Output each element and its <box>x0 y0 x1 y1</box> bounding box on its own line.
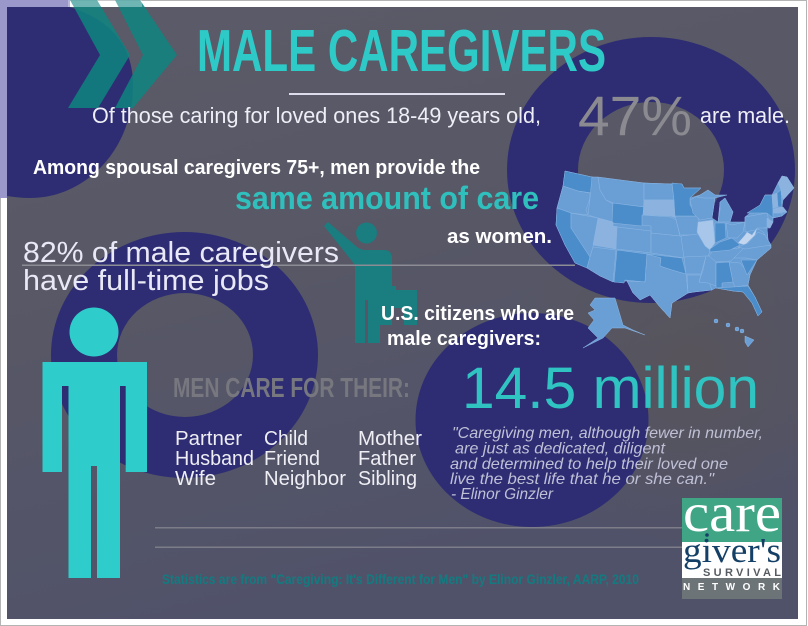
map: Alaska <box>583 298 645 348</box>
list: care recipients <box>175 427 422 490</box>
list: care recipients: Child <box>264 427 308 450</box>
text: same amount of care: as women. <box>447 226 552 248</box>
map: United States <box>556 171 794 348</box>
logo: caregiver's survival network: care <box>683 482 781 543</box>
logo: caregiver's survival network: giver's <box>683 531 781 570</box>
list: care recipients: Mother <box>358 427 422 450</box>
stat: 47 percent are male: Of those caring for loved ones 18-49 years old, <box>92 103 541 128</box>
heading: men care for their: MEN CARE FOR THEIR: <box>173 372 410 403</box>
stat: 14.5 million: 14.5 million <box>462 356 759 421</box>
circle: top left <box>0 0 133 198</box>
list: care recipients: Father <box>358 447 416 470</box>
stat: 47 percent are male: are male. <box>700 103 790 128</box>
list: care recipients: Partner <box>175 427 242 450</box>
icon: chevrons <box>68 0 177 108</box>
source note: Statistics are from "Caregiving: It's Different for Men" by Elinor Ginzler, AARP, 2010 <box>162 572 639 587</box>
stat: 47 percent are male: 47% <box>578 84 692 147</box>
logo: caregiver's survival network: SURVIVAL <box>703 567 781 579</box>
text: full-time jobs stat: 82% of male caregivers <box>23 237 339 269</box>
icon: large teal man <box>42 308 147 578</box>
title: MALE CAREGIVERS <box>197 18 606 84</box>
text: U.S. citizens who are male caregivers: male caregivers: <box>387 327 541 350</box>
text: full-time jobs stat <box>23 237 339 297</box>
bottom rules <box>155 527 682 548</box>
quote: and determined to help their loved one <box>450 456 728 473</box>
text: U.S. citizens who are male caregivers <box>381 302 574 350</box>
text: U.S. citizens who are male caregivers: U.S. citizens who are <box>381 302 574 325</box>
middle rule <box>22 264 575 266</box>
list: care recipients: Husband <box>175 447 254 470</box>
quote: - Elinor Ginzler <box>451 486 554 503</box>
ring: middle left <box>51 232 318 478</box>
stat: 47 percent are male <box>92 84 790 147</box>
quote: live the best life that he or she can." <box>450 471 715 488</box>
title rule <box>289 93 505 95</box>
list: care recipients: Wife <box>175 467 216 490</box>
list: care recipients: Sibling <box>358 467 417 490</box>
text: same amount of care: same amount of care <box>235 180 539 216</box>
logo: caregiver's survival network <box>682 482 782 599</box>
ring: top right <box>507 37 795 303</box>
quote: "Caregiving men, although fewer in number, <box>452 425 763 442</box>
list: care recipients: Friend <box>264 447 320 470</box>
list: care recipients: Neighbor <box>264 467 346 490</box>
text: same amount of care <box>33 156 552 248</box>
text: same amount of care: Among spousal caregivers 75+, men provide the <box>33 156 480 179</box>
icon: small teal man waving <box>324 222 417 343</box>
quote <box>450 425 763 503</box>
circle: bottom centre <box>416 313 648 527</box>
quote: are just as dedicated, diligent <box>455 440 666 458</box>
text: full-time jobs stat: have full-time jobs <box>23 265 269 297</box>
map: Hawaii <box>714 319 754 347</box>
logo: caregiver's survival network: NETWORK <box>683 582 781 593</box>
